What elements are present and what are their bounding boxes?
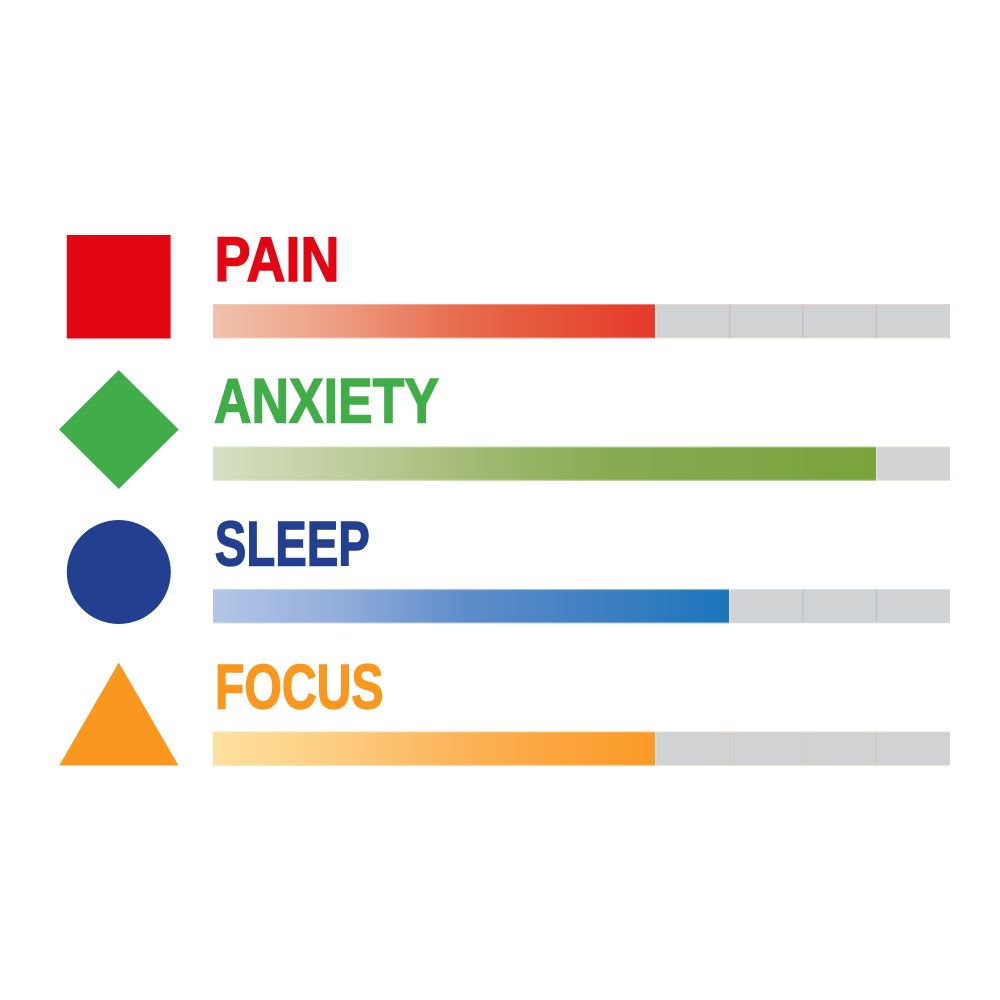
heading: focus: FOCUS (215, 653, 384, 723)
heading: sleep: SLEEP (215, 509, 370, 579)
heading: pain: PAIN (214, 225, 340, 295)
icon: orange triangle (59, 662, 179, 766)
bar: pain (213, 304, 950, 338)
bar: anxiety (213, 447, 950, 481)
heading: anxiety: ANXIETY (214, 367, 439, 437)
icon: blue circle (67, 520, 171, 624)
bar: sleep (213, 589, 950, 623)
icon: red square (67, 235, 171, 338)
icon: green diamond (59, 370, 179, 489)
bar: focus (213, 732, 950, 766)
